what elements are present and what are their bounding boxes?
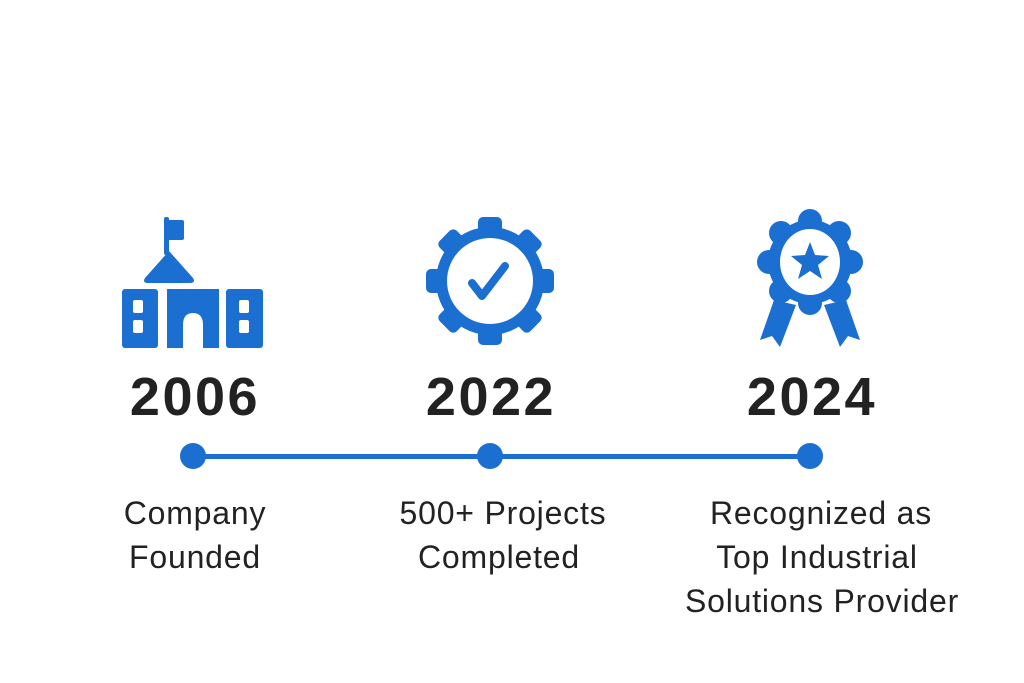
year: 2006: 2006 (130, 367, 260, 427)
icon: gear with check (426, 217, 554, 345)
label: Recognized as Top Industrial Solutions Provider: Solutions Provider (685, 583, 959, 619)
label: Company Founded: Company (124, 495, 266, 531)
year: 2022: 2022 (426, 367, 556, 427)
timeline (180, 443, 823, 469)
label: Recognized as Top Industrial Solutions Provider: Top Industrial (716, 539, 918, 575)
label: 500+ Projects Completed: Completed (418, 539, 580, 575)
icon: award rosette (757, 209, 863, 347)
label: 500+ Projects Completed: 500+ Projects (400, 495, 606, 531)
label: Recognized as Top Industrial Solutions Provider: Recognized as (710, 495, 932, 531)
label: Company Founded: Founded (129, 539, 261, 575)
icon: school building (122, 217, 263, 348)
year: 2024: 2024 (747, 367, 877, 427)
